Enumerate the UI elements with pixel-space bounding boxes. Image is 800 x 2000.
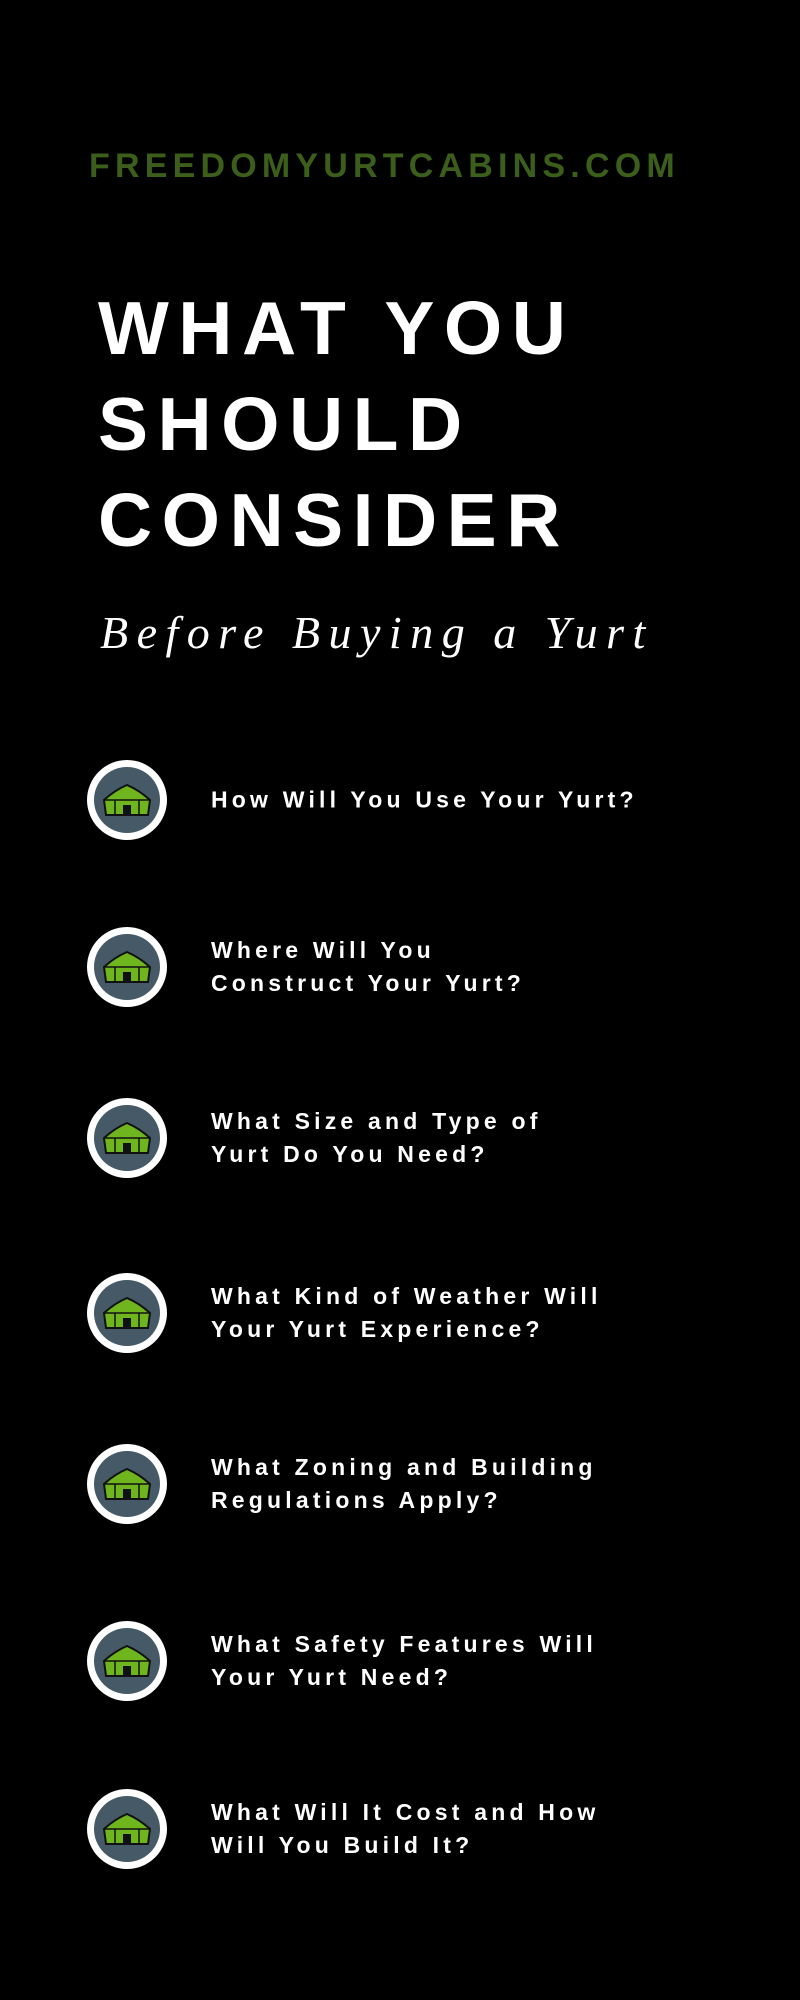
text: What Will It Cost and How xyxy=(211,1799,599,1825)
text: What Safety Features Will xyxy=(211,1631,597,1657)
item 6 xyxy=(87,1621,597,1701)
title: WHAT YOU xyxy=(98,286,575,370)
text: What Zoning and Building xyxy=(211,1454,597,1480)
text: Yurt Do You Need? xyxy=(211,1141,489,1167)
text xyxy=(211,1108,542,1167)
icon: yurt xyxy=(87,1098,167,1178)
item 1 xyxy=(87,760,638,840)
title: CONSIDER xyxy=(98,478,570,562)
text xyxy=(211,1283,602,1342)
brand: FREEDOMYURTCABINS.COM xyxy=(89,147,680,185)
item 5 xyxy=(87,1444,597,1524)
text: Will You Build It? xyxy=(211,1832,473,1858)
item 2 xyxy=(87,927,525,1007)
icon: yurt xyxy=(87,1621,167,1701)
text: What Kind of Weather Will xyxy=(211,1283,602,1309)
text: Your Yurt Experience? xyxy=(211,1316,544,1342)
text: How Will You Use Your Yurt? xyxy=(211,786,638,812)
text: Regulations Apply? xyxy=(211,1487,502,1513)
text xyxy=(211,1799,599,1858)
text xyxy=(211,937,525,996)
text: What Size and Type of xyxy=(211,1108,542,1134)
text xyxy=(211,1454,597,1513)
item 3 xyxy=(87,1098,542,1178)
text xyxy=(211,1631,597,1690)
subtitle: Before Buying a Yurt xyxy=(100,607,654,658)
text: Your Yurt Need? xyxy=(211,1664,452,1690)
text: Where Will You xyxy=(211,937,435,963)
icon: yurt xyxy=(87,1444,167,1524)
icon: yurt xyxy=(87,1273,167,1353)
item 7 xyxy=(87,1789,599,1869)
item 4 xyxy=(87,1273,602,1353)
text: Construct Your Yurt? xyxy=(211,970,525,996)
icon: yurt xyxy=(87,760,167,840)
title: SHOULD xyxy=(98,382,472,466)
title xyxy=(98,286,575,562)
icon: yurt xyxy=(87,1789,167,1869)
icon: yurt xyxy=(87,927,167,1007)
